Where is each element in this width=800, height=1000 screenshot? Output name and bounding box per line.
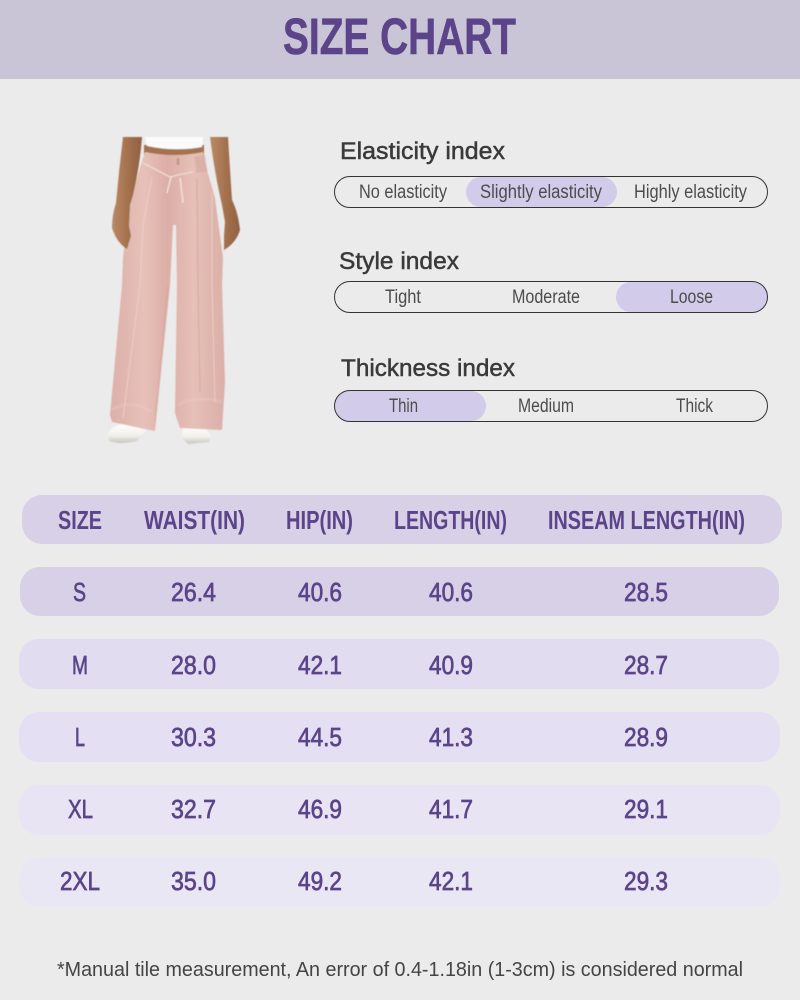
- row: XL: [19, 785, 780, 835]
- product photo: pink wide-leg pants: [108, 137, 240, 444]
- table header row: LENGTH(IN): [394, 505, 507, 535]
- size table: [19, 495, 782, 907]
- left arm and hand: [112, 137, 142, 249]
- heading: Thickness index: [341, 355, 515, 382]
- row: L: 28.9: [624, 722, 668, 752]
- row: 2XL: 29.3: [624, 866, 668, 896]
- table header row: WAIST(IN): [144, 505, 245, 535]
- heading: Elasticity index: [340, 138, 505, 165]
- panel: thickness index: [334, 355, 768, 422]
- row: S: 40.6: [429, 577, 473, 607]
- row: M: 40.9: [429, 650, 473, 680]
- row: M: 28.7: [624, 650, 668, 680]
- white crop top: [145, 137, 203, 149]
- pants body: [110, 152, 225, 431]
- row: S: 26.4: [171, 577, 216, 607]
- panel: style index: [334, 248, 768, 312]
- row: S: [20, 567, 779, 616]
- selector pill: Highly elasticity: [634, 182, 747, 203]
- selector pill: Medium: [518, 396, 574, 417]
- row: M: M: [72, 650, 88, 680]
- selector pill: Tight: [385, 287, 422, 308]
- row: XL: XL: [68, 794, 93, 824]
- selector pill: [334, 390, 768, 422]
- row: L: 41.3: [429, 722, 473, 752]
- row: S: 28.5: [624, 577, 668, 607]
- selector pill: Thick: [676, 396, 713, 417]
- table header row: [22, 495, 782, 544]
- selector pill: [334, 176, 768, 208]
- panel: elasticity index: [334, 138, 768, 208]
- footnote: *Manual tile measurement, An error of 0.4-1.18in (1-3cm) is considered normal: [57, 959, 743, 981]
- row: 2XL: 49.2: [298, 866, 342, 896]
- row: 2XL: [19, 857, 780, 907]
- row: L: L: [75, 722, 85, 752]
- table header row: HIP(IN): [286, 505, 353, 535]
- selector pill: No elasticity: [359, 182, 447, 203]
- row: XL: 32.7: [171, 794, 216, 824]
- heading: Style index: [339, 248, 459, 275]
- row: S: 40.6: [298, 577, 342, 607]
- row: M: [19, 639, 779, 689]
- table header row: INSEAM LENGTH(IN): [548, 505, 745, 535]
- row: 2XL: 2XL: [60, 866, 100, 896]
- row: L: 30.3: [171, 722, 216, 752]
- row: M: 28.0: [171, 650, 216, 680]
- table header row: SIZE: [58, 505, 102, 535]
- shoes: [108, 423, 146, 443]
- row: S: S: [73, 577, 86, 607]
- row: XL: 46.9: [298, 794, 342, 824]
- row: 2XL: 42.1: [429, 866, 473, 896]
- selector pill: Moderate: [512, 287, 580, 308]
- right arm and hand: [210, 137, 240, 250]
- row: 2XL: 35.0: [171, 866, 216, 896]
- row: M: 42.1: [298, 650, 342, 680]
- row: XL: 41.7: [429, 794, 473, 824]
- row: L: 44.5: [298, 722, 342, 752]
- row: XL: 29.1: [624, 794, 668, 824]
- pants seams, folds and drawstring: [112, 156, 222, 422]
- selector pill: Thin: [389, 396, 418, 417]
- selector pill: Slightly elasticity: [480, 182, 602, 203]
- row: L: [19, 712, 780, 762]
- midriff: [144, 145, 204, 157]
- selector pill: Loose: [670, 287, 713, 308]
- selector pill: [334, 282, 768, 312]
- header banner: [0, 0, 800, 79]
- title: SIZE CHART: [283, 8, 516, 65]
